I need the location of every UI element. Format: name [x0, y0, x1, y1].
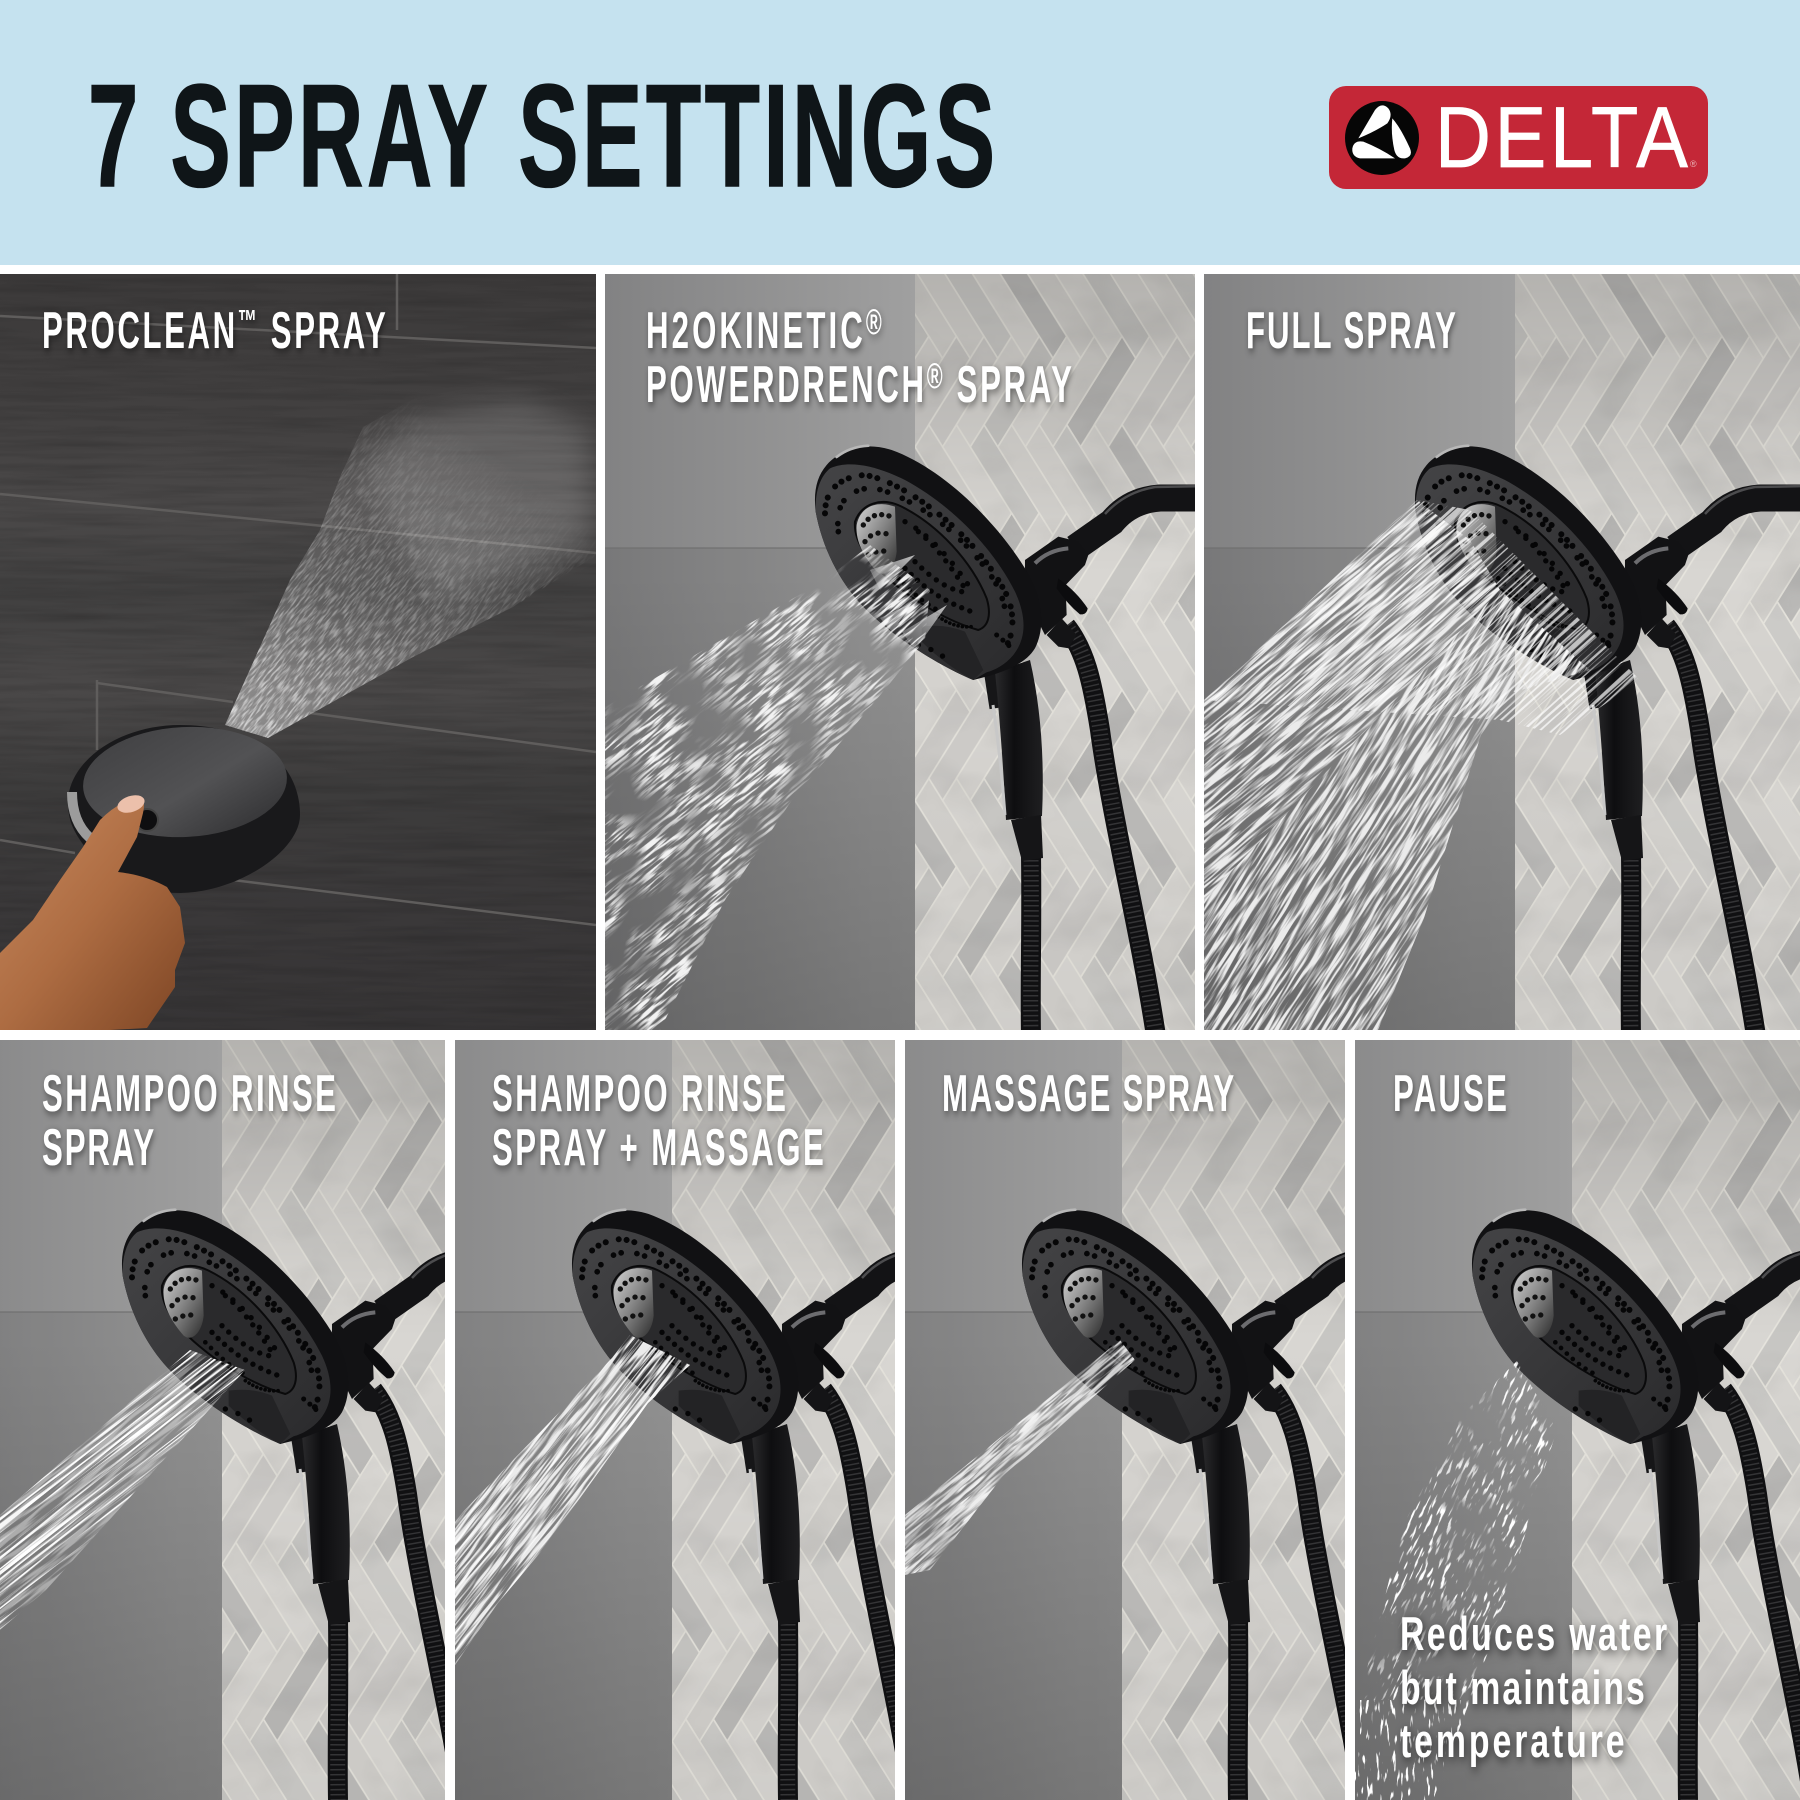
panel: full spray — [1204, 274, 1800, 1030]
shower fixture on wall — [1195, 265, 1800, 1036]
water spray — [1204, 500, 1638, 1030]
heading: shampoo rinse spray + massage: SHAMPOO RINSE — [492, 1065, 786, 1123]
note: reduces water but maintains temperature — [1400, 1608, 1667, 1767]
panel: shampoo rinse spray plus massage — [455, 1040, 895, 1800]
shower fixture on wall — [802, 1029, 1417, 1800]
heading: shampoo rinse spray + massage: SPRAY + MASSAGE — [492, 1119, 824, 1177]
dark stone wall — [0, 274, 596, 1030]
heading: h2okinetic powerdrench spray: SPRAY — [945, 356, 1072, 414]
title banner — [0, 0, 1800, 265]
heading: h2okinetic powerdrench spray: ® — [927, 356, 943, 396]
heading: h2okinetic powerdrench spray — [646, 302, 1072, 414]
heading: h2okinetic powerdrench spray: ® — [866, 302, 882, 342]
shower fixture on wall — [595, 265, 1210, 1036]
logo: Delta: DELTA — [1435, 90, 1688, 186]
water droplets — [1355, 1361, 1554, 1800]
logo: Delta — [1329, 86, 1708, 189]
water spray — [455, 1335, 690, 1665]
logo: Delta: ® — [1690, 159, 1697, 169]
heading: proclean spray: SPRAY — [260, 302, 386, 360]
heading: h2okinetic powerdrench spray: H2OKINETIC — [646, 302, 863, 360]
panel: pause — [1355, 1040, 1800, 1800]
heading: shampoo rinse spray: SPRAY — [42, 1119, 154, 1177]
hand pressing button — [0, 792, 185, 1030]
panel: shampoo rinse spray — [0, 1040, 445, 1800]
shower fixture on wall — [352, 1029, 967, 1800]
heading: shampoo rinse spray: SHAMPOO RINSE — [42, 1065, 336, 1123]
water spray fan — [225, 394, 596, 738]
note: reduces water but maintains temperature: temperature — [1400, 1715, 1625, 1767]
shower fixture on wall — [0, 1029, 517, 1800]
water spray — [0, 1350, 245, 1630]
heading: h2okinetic powerdrench spray: POWERDRENCH — [646, 356, 924, 414]
heading: proclean spray: PROCLEAN — [42, 302, 235, 360]
water spray — [905, 1340, 1135, 1575]
panel: massage spray — [905, 1040, 1345, 1800]
panel: H2OKinetic PowerDrench spray — [605, 274, 1195, 1030]
heading: proclean spray: ™ — [238, 303, 257, 339]
note: reduces water but maintains temperature: Reduces water — [1400, 1608, 1667, 1660]
water spray — [605, 545, 947, 1030]
hand-held spray head — [68, 722, 300, 893]
shower fixture on wall — [1252, 1029, 1800, 1800]
heading: shampoo rinse spray — [42, 1065, 336, 1177]
heading: pause: PAUSE — [1393, 1065, 1507, 1123]
heading: massage spray: MASSAGE SPRAY — [942, 1065, 1234, 1123]
heading: 7 spray settings: 7 SPRAY SETTINGS — [88, 54, 995, 217]
panel: ProClean spray — [0, 274, 596, 1030]
heading: shampoo rinse spray + massage — [492, 1065, 824, 1177]
note: reduces water but maintains temperature: but maintains — [1400, 1662, 1645, 1714]
heading: full spray: FULL SPRAY — [1246, 302, 1456, 360]
